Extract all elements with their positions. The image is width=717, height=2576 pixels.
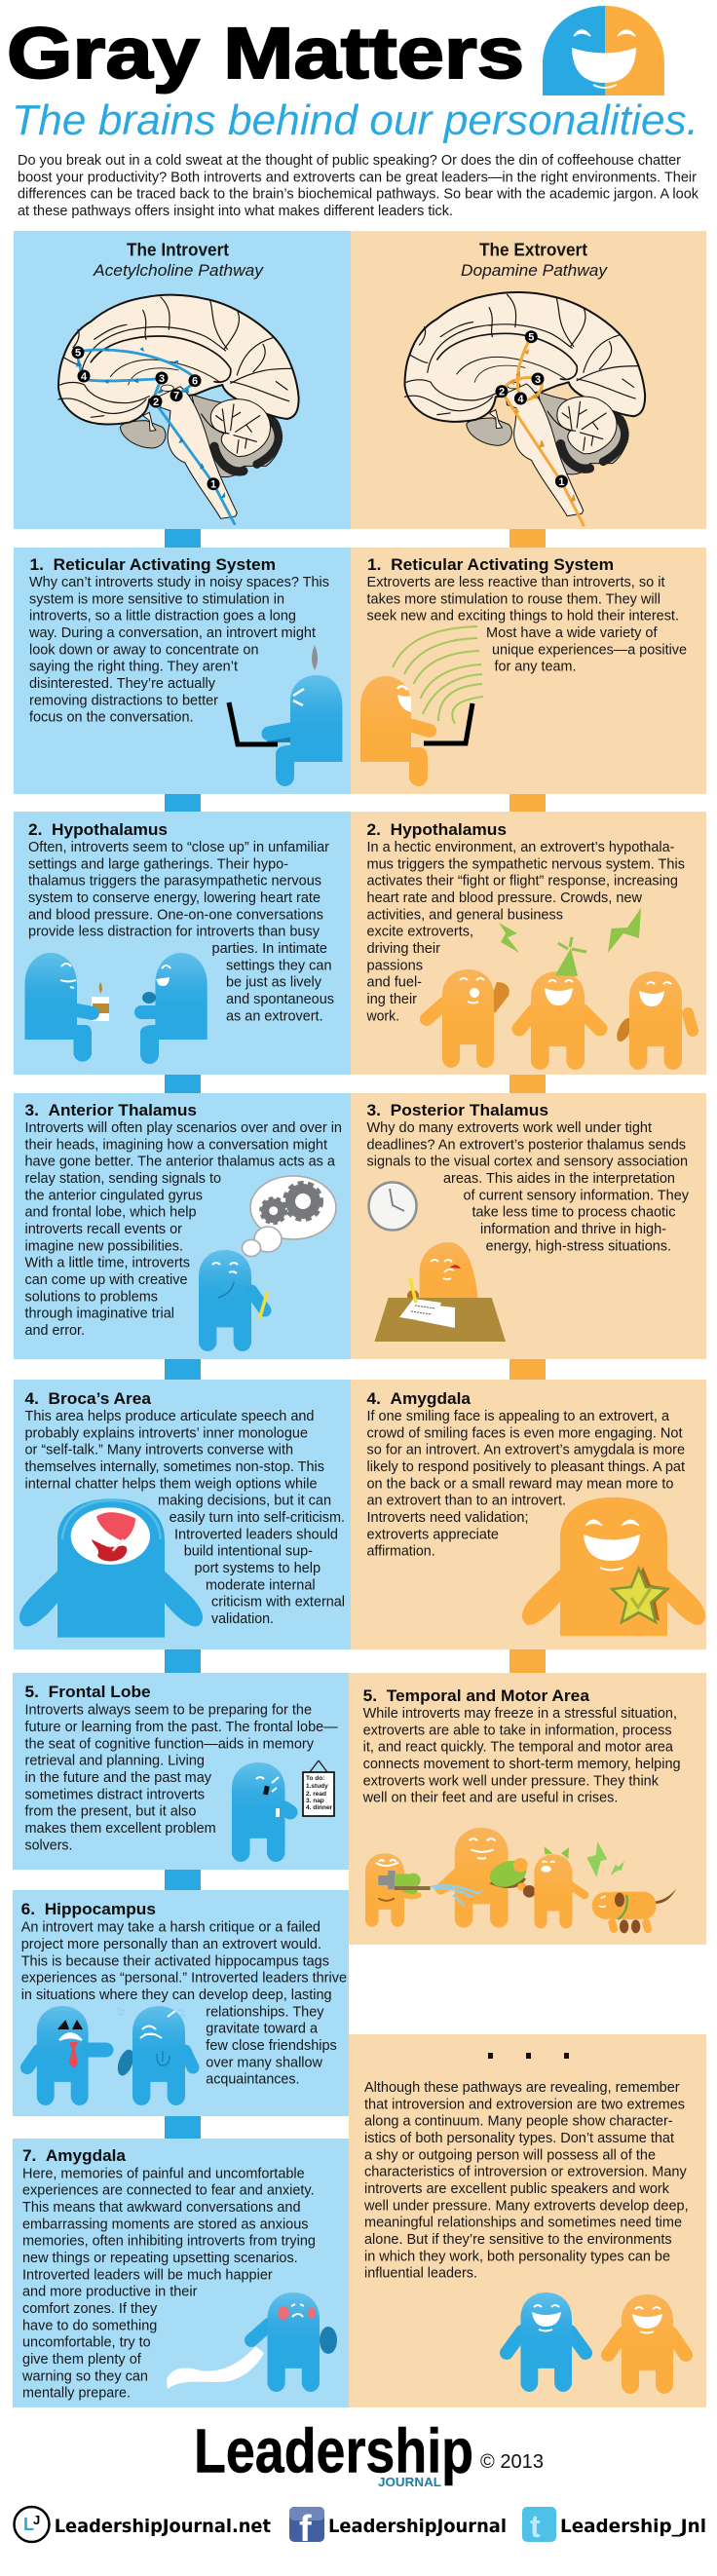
text: introvert 3 anterior thalamus: their heads, imagining how a conversation might [25,1136,328,1153]
text: introvert 4 brocas area: validation. [211,1610,274,1627]
text: introvert 3 anterior thalamus: solutions to problems [25,1288,158,1305]
text: extrovert 2 hypothalamus: 2. Hypothalamus [366,821,507,839]
text: introvert 1 reticular activating system: Why can’t introverts study in noisy spaces? This [29,574,329,590]
text: introvert 7 amygdala: have to do something [22,2317,157,2333]
text: introvert 1 reticular activating system [28,556,329,726]
text: introvert 7 amygdala: give them plenty of [22,2351,142,2368]
text: introvert 4 brocas area: making decisions, but it can [158,1493,331,1509]
text: conclusion: that introversion and extroversion are two extremes [364,2096,685,2112]
illustration: introvert thinking with gear thought bubble [199,1176,336,1351]
text: extrovert 2 hypothalamus: work. [366,1007,399,1024]
text: conclusion: in which they work, both personality types can be [364,2248,670,2264]
text: extrovert 4 amygdala: so for an introvert. An extrovert’s amygdala is more [366,1442,685,1458]
text: introvert 1 reticular activating system: look down or away to concentrate on [29,641,259,658]
website link with LJ icon: L [23,2515,34,2534]
text: extrovert 4 amygdala: 4. Amygdala [366,1390,472,1408]
text: introvert 1 reticular activating system: saying the right thing. They aren’t [29,659,239,675]
website link with LJ icon [14,2507,271,2542]
text: conclusion: meaningful relationships and sometimes need time [364,2215,682,2231]
text: conclusion: well under pressure. Many extroverts develop deep, [363,2197,689,2214]
text: introvert 5 frontal lobe: from the present, but it also [25,1803,196,1820]
text: introvert 1 reticular activating system: focus on the conversation. [29,709,193,726]
diagram: extrovert brain dopamine pathway: 3 [535,374,541,386]
heading: the extrovert [461,240,609,280]
diagram: introvert brain acetylcholine pathway: 3 [159,373,165,385]
text: introvert 4 brocas area: build intentional sup- [184,1543,313,1560]
text: extrovert 5 temporal and motor area: it, and react quickly. The temporal and motor area [363,1739,674,1756]
text: introvert 5 frontal lobe: the seat of cognitive function—aids in memory [25,1735,314,1752]
text: introvert 2 hypothalamus: settings they can [226,957,331,973]
illustration: introvert with to-do list: 4. dinner [306,1804,333,1811]
illustration: introvert with chattering teeth in head [19,1498,203,1638]
text: introvert 6 hippocampus: experiences as “personal.” Introverted leaders thrive [21,1970,347,1987]
text: introvert 6 hippocampus: 6. Hippocampus [21,1901,156,1918]
text: introvert 1 reticular activating system: system is more sensitive to stimulation in [29,590,284,607]
text: introvert 2 hypothalamus: provide less distraction for introverts than busy [28,924,320,940]
text: introvert 1 reticular activating system: removing distractions to better [29,692,218,708]
text: extrovert 2 hypothalamus: activates their “fight or flight” response, increasing [366,873,678,890]
illustration: introvert with to-do list [232,1761,334,1862]
text: introvert 3 anterior thalamus: and error. [25,1322,85,1339]
text: introvert 5 frontal lobe: retrieval and planning. Living [25,1753,205,1769]
text: introvert 2 hypothalamus: Often, introverts seem to “close up” in unfamiliar [28,839,329,855]
illustration: smiling extrovert with gold star [522,1497,705,1636]
text: extrovert 4 amygdala: extroverts appreciate [366,1526,499,1542]
text: extrovert 4 amygdala: an extrovert than to an introvert. [366,1493,566,1509]
diagram: introvert brain acetylcholine pathway: 5 [75,348,81,360]
text: extrovert 5 temporal and motor area: 5. Temporal and Motor Area [363,1687,590,1705]
text: introvert 2 hypothalamus: thalamus triggers the parasympathetic nervous [28,873,321,890]
diagram: introvert brain acetylcholine pathway: 2 [153,397,159,408]
text: introvert 1 reticular activating system: introverts, so a little distraction goes a long [29,608,296,625]
text: introvert 5 frontal lobe [25,1684,338,1853]
text: extrovert 5 temporal and motor area: connects movement to short-term memory, helping [363,1756,681,1772]
text: conclusion: influential leaders. [364,2265,477,2282]
text: extrovert 4 amygdala: likely to respond positively to pleasant things. A pat [366,1458,686,1475]
text: introvert 5 frontal lobe: solvers. [25,1837,72,1853]
text: introvert 3 anterior thalamus: relay station, sending signals to [25,1170,221,1187]
text: introvert 2 hypothalamus: and spontaneous [226,991,334,1007]
heading: the extrovert: The Extrovert [479,240,587,259]
intro text: Do you break out in a cold sweat at the thought of public speaking? Or does the din of coffeehouse chatter [18,152,681,169]
text: introvert 6 hippocampus: gravitate toward a [206,2021,319,2037]
text: extrovert 2 hypothalamus: and fuel- [366,974,422,991]
text: introvert 4 brocas area: Introverted leaders should [174,1526,338,1542]
text: extrovert 1 reticular activating system: seek new and exciting things to hold their interest. [366,608,679,625]
text: introvert 4 brocas area: 4. Broca’s Area [25,1390,152,1408]
illustration: clock [368,1183,417,1230]
diagram: extrovert brain dopamine pathway: 5 [528,332,534,344]
text: introvert 7 amygdala: Introverted leaders will be much happier [22,2266,273,2283]
text: extrovert 4 amygdala: affirmation. [366,1543,435,1560]
text: introvert 4 brocas area: port systems to help [195,1560,321,1576]
text: extrovert 2 hypothalamus [366,821,685,1024]
illustration: introvert with to-do list: 2. read [306,1791,326,1798]
text: extrovert 1 reticular activating system: for any team. [495,659,577,675]
panel: extrovert column backgrounds [349,231,706,2407]
twitter link [522,2507,706,2544]
website link with LJ icon: LeadershipJournal.net [55,2516,271,2537]
heading: the introvert: The Introvert [127,240,229,259]
illustration: critic introvert with tie and upset introvert [27,2006,193,2105]
text: introvert 5 frontal lobe: Introverts always seem to be preparing for the [25,1702,312,1719]
text: introvert 1 reticular activating system: 1. Reticular Activating System [29,556,276,574]
diagram: introvert brain acetylcholine pathway [58,295,299,524]
text: introvert 3 anterior thalamus: and frontal lobe, which help [25,1204,197,1221]
facebook link: f [299,2509,312,2550]
diagram: extrovert brain dopamine pathway: 4 [517,394,524,405]
text: introvert 3 anterior thalamus: 3. Anterior Thalamus [25,1102,197,1119]
illustration: blushing introvert with paper scroll [167,2292,337,2392]
diagram: extrovert brain dopamine pathway [404,292,645,525]
illustration: happy introvert and extrovert [507,2292,686,2394]
text: extrovert 3 posterior thalamus: energy, high-stress situations. [486,1237,671,1254]
text: extrovert 2 hypothalamus: heart rate and blood pressure. Crowds, new [366,890,642,906]
text: introvert 7 amygdala: and more productive in their [22,2284,197,2300]
text: introvert 3 anterior thalamus: through imaginative trial [25,1306,174,1322]
text: introvert 7 amygdala [21,2147,316,2402]
intro text: differences can be traced back to the brain’s biochemical pathways. So bear with the academic jargon. A look [18,186,698,203]
text: introvert 3 anterior thalamus: Introverts will often play scenarios over and over in [25,1119,342,1136]
text: introvert 6 hippocampus: over many shallow [206,2054,322,2070]
text: introvert 6 hippocampus: acquaintances. [206,2071,300,2088]
text: introvert 3 anterior thalamus: imagine new possibilities. [25,1237,183,1254]
logo: Leadership Journal: Leadership [194,2416,473,2486]
text: extrovert 1 reticular activating system [366,556,687,675]
text: extrovert 3 posterior thalamus: deadlines? An extrovert’s posterior thalamus sends [366,1136,686,1153]
text: introvert 7 amygdala: new things or repeating upsetting scenarios. [22,2250,298,2266]
facebook link [289,2507,507,2550]
intro text [18,152,698,219]
text: introvert 2 hypothalamus: system to conserve energy, lowering heart rate [28,890,321,906]
diagram: introvert brain acetylcholine pathway: 7 [173,391,179,402]
text: extrovert 3 posterior thalamus [366,1102,689,1254]
logo: Leadership Journal: JOURNAL [378,2475,441,2489]
text: introvert 2 hypothalamus: be just as lively [226,974,321,991]
text: introvert 6 hippocampus: project more personally than an extrovert would. [21,1936,321,1952]
illustration: introvert with to-do list: 1.study [306,1783,328,1790]
diagram: extrovert brain dopamine pathway: 2 [499,387,505,398]
text: introvert 2 hypothalamus: as an extrovert. [226,1007,323,1024]
text: extrovert 3 posterior thalamus: 3. Posterior Thalamus [366,1102,548,1119]
text: introvert 2 hypothalamus: 2. Hypothalamus [28,821,168,839]
text: extrovert 2 hypothalamus: ing their [366,991,417,1007]
text: introvert 4 brocas area: easily turn into self-criticism. [170,1509,345,1526]
text: introvert 2 hypothalamus: settings and large gatherings. Their hypo- [28,855,288,872]
text: conclusion: a shy or outgoing person will possess all of the [364,2146,656,2163]
twitter link: Leadership_Jnl [560,2516,706,2537]
text: extrovert 3 posterior thalamus: areas. This aides in the interpretation [443,1170,675,1187]
text: extrovert 4 amygdala: crowd of smiling faces is even more engaging. Not [366,1424,683,1441]
heading: the introvert [93,240,265,280]
facebook link: LeadershipJournal [328,2516,507,2537]
illustration: introvert with to-do list: 3. nap [306,1798,324,1804]
text: introvert 3 anterior thalamus [25,1102,342,1339]
text: conclusion: introverts are excellent public speakers and work [364,2180,669,2197]
text: extrovert 2 hypothalamus: excite extroverts, [366,924,473,940]
text: introvert 4 brocas area: or “self-talk.” Many introverts converse with [25,1442,293,1458]
text: introvert 4 brocas area: moderate internal [206,1576,316,1593]
text: introvert 5 frontal lobe: future or learning from the past. The frontal lobe— [25,1719,338,1735]
connectors: orange squares [509,529,546,1673]
text: introvert 7 amygdala: memories, often inhibiting introverts from trying [22,2233,316,2250]
diagram: introvert brain acetylcholine pathway: 6 [192,376,198,388]
text: introvert 4 brocas area: internal chatter helps them weigh options while [25,1475,318,1492]
text: introvert 3 anterior thalamus: With a little time, introverts [25,1255,190,1271]
text: extrovert 1 reticular activating system: unique experiences—a positive [492,641,687,658]
text: extrovert 3 posterior thalamus: information and thrive in high- [480,1221,666,1237]
text: introvert 6 hippocampus: in situations where they can develop deep, lasting [21,1987,332,2003]
illustration: extroverts with water gun, baby and dog [365,1828,676,1933]
connectors: blue squares [165,529,201,2139]
illustration: introvert with to-do list: To do: [306,1775,324,1782]
text: extrovert 2 hypothalamus: In a hectic environment, an extrovert’s hypothala- [366,839,674,855]
text: introvert 5 frontal lobe: 5. Frontal Lobe [25,1684,151,1701]
illustration: extrovert at laptop with sound waves [360,626,483,786]
text: extrovert 2 hypothalamus: passions [366,957,423,973]
text: introvert 7 amygdala: embarrassing moments are stored as anxious [22,2216,308,2232]
text: extrovert 5 temporal and motor area [362,1687,681,1806]
text: introvert 1 reticular activating system: disinterested. They’re actually [29,675,215,692]
heading: the introvert: Acetylcholine Pathway [93,262,265,280]
text: introvert 5 frontal lobe: sometimes distract introverts [25,1786,205,1802]
text: conclusion: Although these pathways are revealing, remember [364,2079,680,2096]
logo: Leadership Journal: © 2013 [480,2451,544,2473]
text: conclusion: characteristics of introversion or extroversion. Many [364,2164,687,2180]
text: extrovert 4 amygdala: Introverts need validation; [366,1509,528,1526]
text: introvert 7 amygdala: mentally prepare. [22,2385,131,2402]
text: introvert 7 amygdala: uncomfortable, try to [22,2334,151,2351]
text: extrovert 1 reticular activating system: Extroverts are less reactive than introverts, so it [366,574,665,590]
text: introvert 1 reticular activating system: way. During a conversation, an introvert might [28,625,317,641]
text: extrovert 1 reticular activating system: 1. Reticular Activating System [367,556,614,574]
text: introvert 6 hippocampus: few close friendships [206,2037,337,2054]
text: introvert 2 hypothalamus [28,821,334,1024]
diagram: introvert brain acetylcholine pathway: 4 [81,371,88,383]
text: extrovert 1 reticular activating system: takes more stimulation to rouse them. They will [366,590,660,607]
text: introvert 2 hypothalamus: and blood pressure. One-on-one conversations [28,906,323,923]
heading: the extrovert: Dopamine Pathway [461,262,609,280]
intro text: boost your productivity? Both introverts and extroverts can be great leaders—in the right environments. Their [18,169,697,185]
text: conclusion [363,2079,689,2282]
text: conclusion: along a continuum. Many people show character- [364,2113,673,2130]
subtitle: The brains behind our personalities. [12,96,698,144]
panel: introvert column backgrounds [13,231,351,2407]
text: extrovert 3 posterior thalamus: Why do many extroverts work well under tight [366,1119,653,1136]
text: extrovert 2 hypothalamus: driving their [366,940,440,957]
illustration: extrovert writing at desk [374,1242,506,1342]
diagram: introvert brain acetylcholine pathway: 1 [210,479,216,491]
text: extrovert 2 hypothalamus: mus triggers the sympathetic nervous system. This [366,855,685,872]
text: introvert 7 amygdala: This means that awkward conversations and [22,2199,300,2216]
text: extrovert 4 amygdala [366,1390,686,1560]
text: introvert 6 hippocampus: An introvert may take a harsh critique or a failed [21,1919,321,1936]
separator dots [488,2053,569,2059]
website link with LJ icon: J [33,2513,40,2527]
icon: half blue half orange smiling face [543,6,664,95]
twitter link: t [530,2509,541,2544]
text: introvert 6 hippocampus [21,1901,347,2088]
illustration: introvert at laptop with steam [229,645,342,786]
illustration: three partying extroverts [427,908,693,1070]
title: Gray Matters [7,13,524,94]
text: introvert 2 hypothalamus: parties. In intimate [212,940,327,957]
text: introvert 4 brocas area: themselves internally, sometimes non-stop. This [25,1458,324,1475]
text: introvert 4 brocas area [25,1390,345,1627]
diagram: extrovert brain dopamine pathway: 1 [558,476,564,488]
text: introvert 5 frontal lobe: in the future and the past may [25,1769,211,1786]
intro text: at these pathways offers insight into what makes different leaders tick. [18,203,453,219]
text: extrovert 4 amygdala: If one smiling face is appealing to an extrovert, a [366,1408,670,1424]
illustration: two introverts talking over coffee [25,953,208,1064]
text: extrovert 5 temporal and motor area: While introverts may freeze in a stressful situation, [363,1705,677,1722]
text: conclusion: istics of both personality types. Don’t assume that [364,2130,675,2146]
text: introvert 7 amygdala: experiences are connected to fear and anxiety. [22,2182,315,2199]
text: extrovert 4 amygdala: on the back or a small reward may mean more to [366,1475,674,1492]
text: extrovert 1 reticular activating system: Most have a wide variety of [486,625,658,641]
text: introvert 7 amygdala: 7. Amygdala [22,2147,127,2165]
text: introvert 6 hippocampus: relationships. They [206,2003,324,2020]
text: extrovert 3 posterior thalamus: take less time to process chaotic [472,1204,676,1221]
text: introvert 4 brocas area: probably explains introverts’ inner monologue [25,1424,308,1441]
text: extrovert 5 temporal and motor area: well on their feet and are useful in crises. [362,1790,618,1806]
text: introvert 3 anterior thalamus: the anterior cingulated gyrus [25,1187,203,1203]
text: extrovert 3 posterior thalamus: signals to the visual cortex and sensory association [366,1154,688,1170]
text: extrovert 3 posterior thalamus: of current sensory information. They [464,1187,689,1203]
text: introvert 7 amygdala: comfort zones. If they [22,2300,158,2317]
text: introvert 4 brocas area: criticism with external [211,1594,345,1610]
text: introvert 5 frontal lobe: makes them excellent problem [25,1820,216,1837]
text: extrovert 5 temporal and motor area: extroverts are able to take in information, process [363,1722,672,1738]
text: conclusion: alone. But if they’re sensitive to the environments [364,2231,672,2248]
text: introvert 4 brocas area: This area helps produce articulate speech and [25,1408,314,1424]
text: introvert 3 anterior thalamus: introverts recall events or [25,1221,182,1237]
text: extrovert 2 hypothalamus: activities, and general business [366,906,563,923]
text: introvert 6 hippocampus: This is because their activated hippocampus tags [21,1952,329,1969]
text: introvert 7 amygdala: Here, memories of painful and uncomfortable [22,2165,305,2181]
text: extrovert 5 temporal and motor area: extroverts work well under pressure. They think [363,1772,659,1789]
text: introvert 7 amygdala: warning so they can [21,2368,148,2384]
text: introvert 3 anterior thalamus: have gone better. The anterior thalamus acts as a [25,1154,336,1170]
text: introvert 3 anterior thalamus: can come up with creative [25,1271,187,1288]
